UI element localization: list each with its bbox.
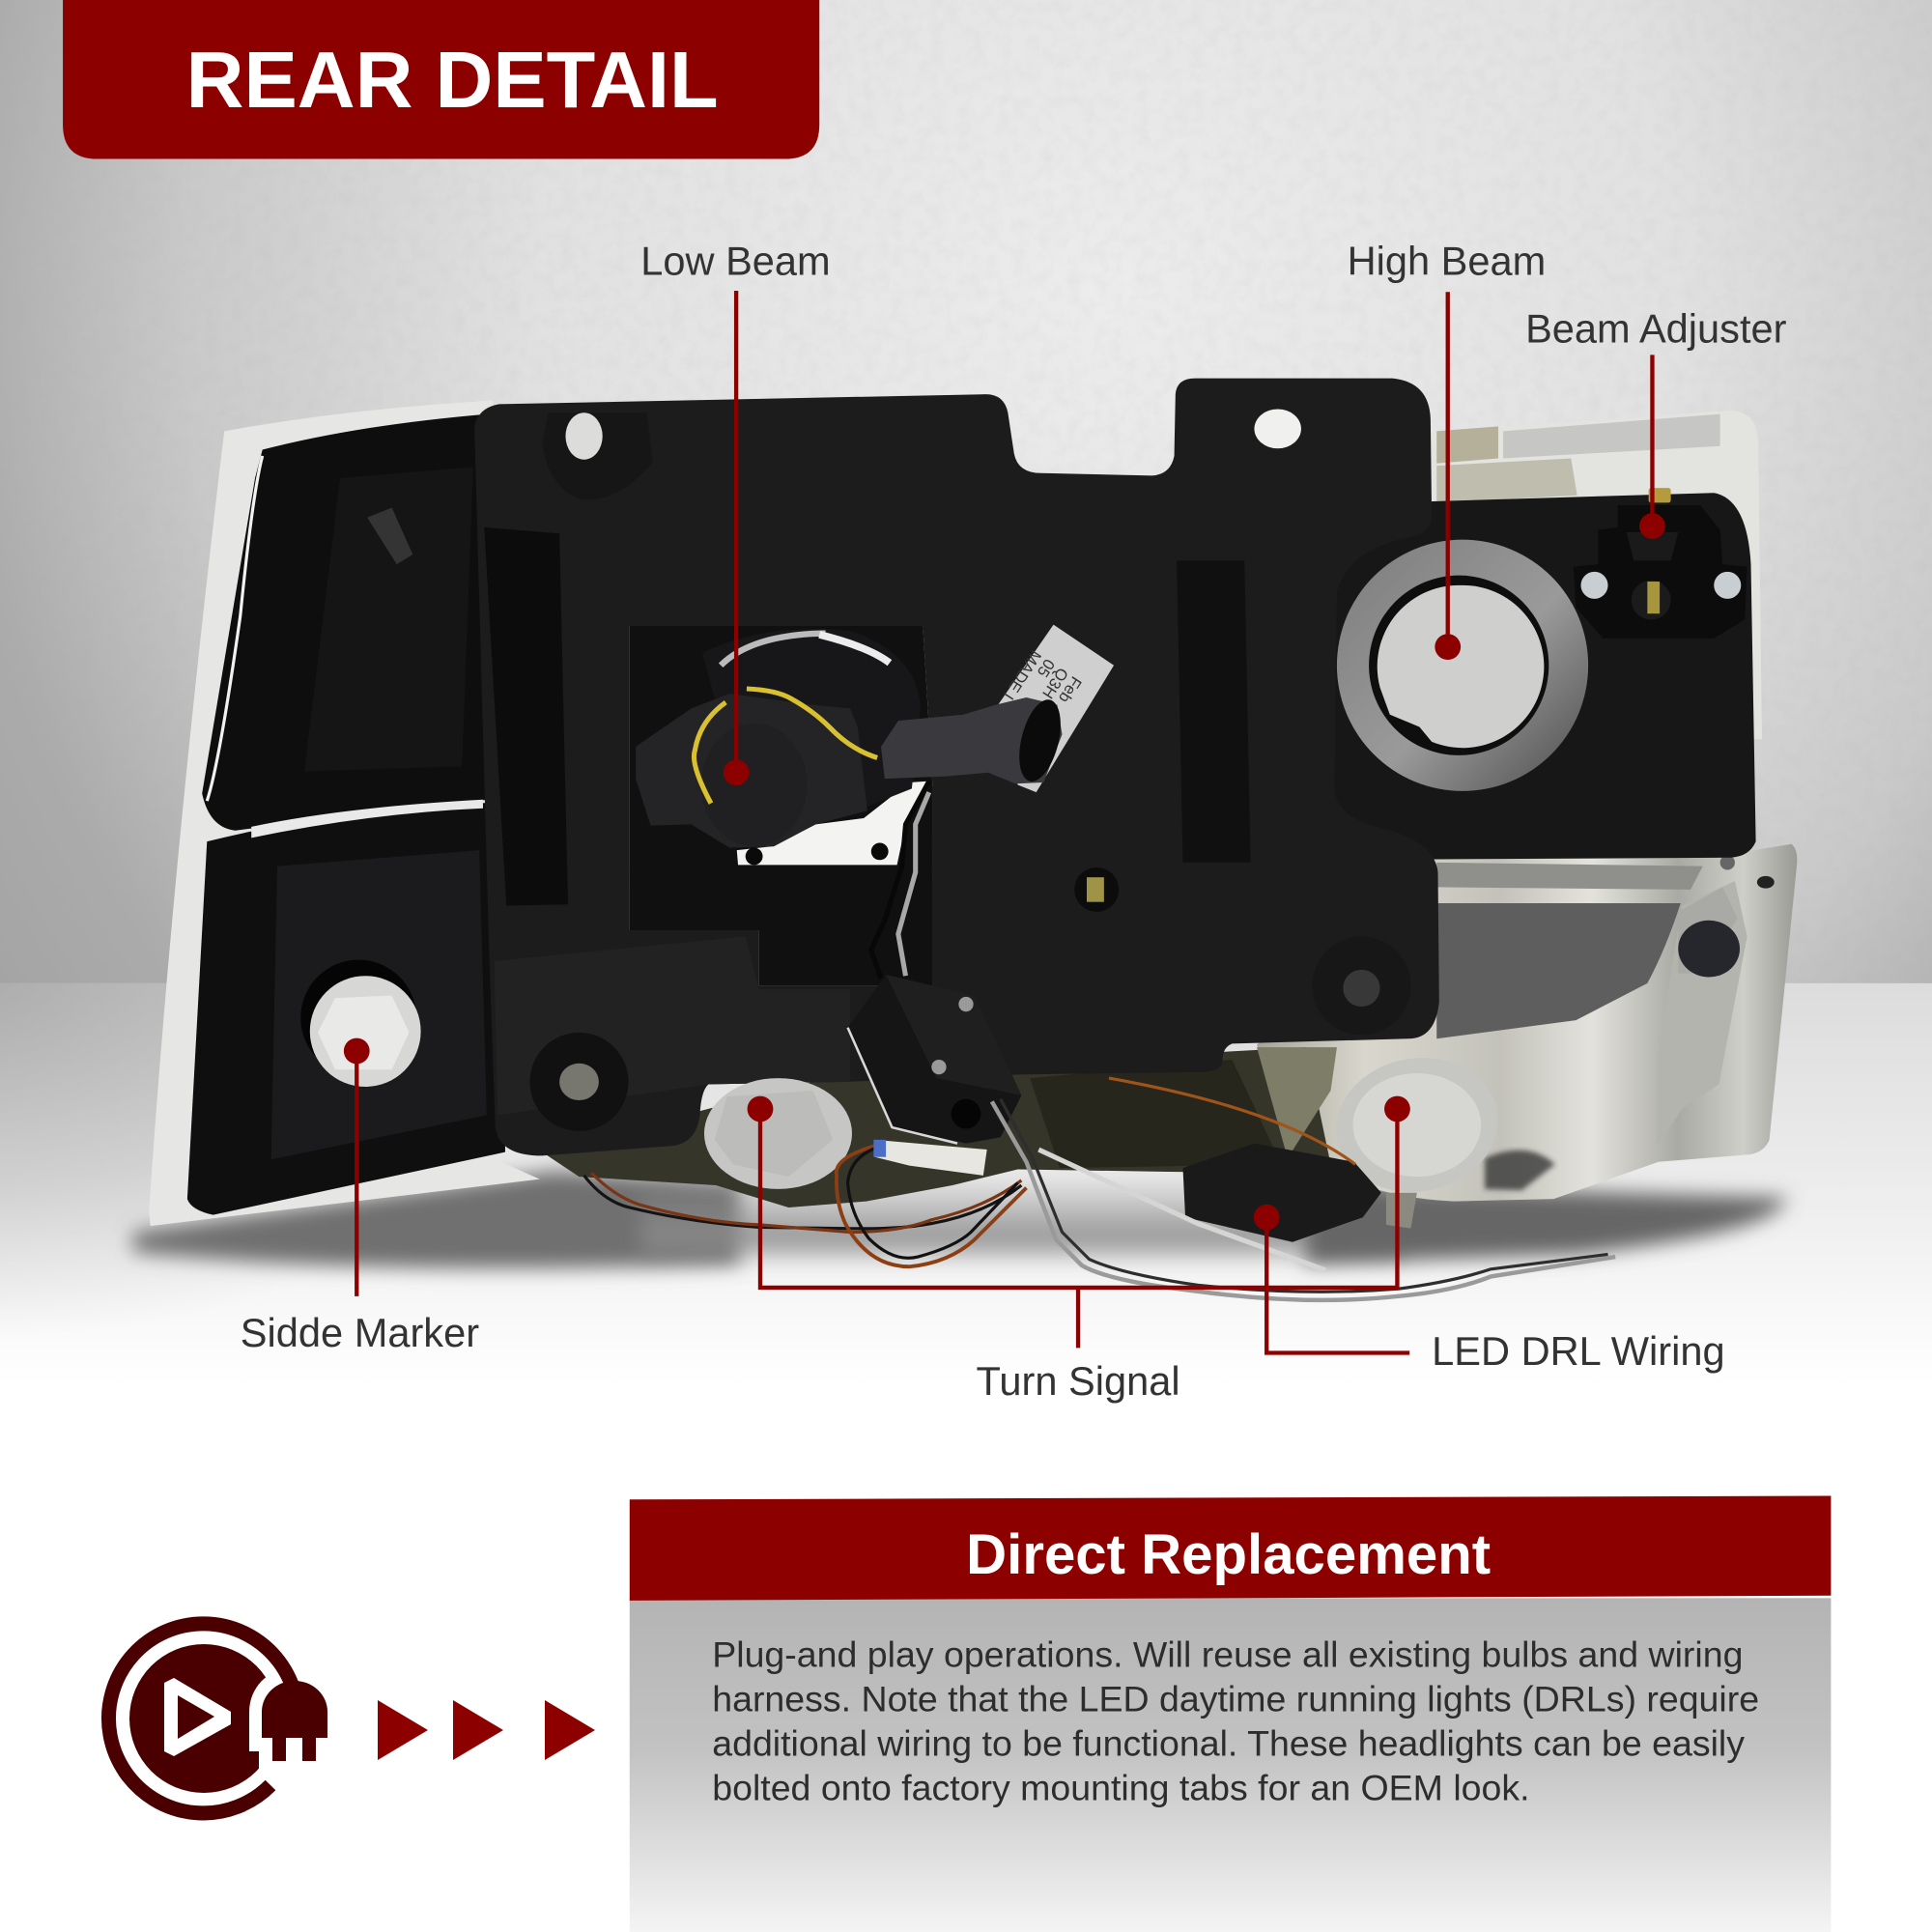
callout: Side Marker xyxy=(241,1038,479,1355)
turn signal bulb port, left xyxy=(704,1078,852,1189)
LED DRL control box xyxy=(1182,1144,1417,1242)
clear outer lens, left side xyxy=(149,401,540,1226)
wiring connector xyxy=(881,696,1068,785)
high beam reflector port xyxy=(1337,540,1588,791)
callout: High Beam xyxy=(1348,238,1546,660)
arrows pointing to panel xyxy=(378,1700,595,1760)
plate shading details xyxy=(484,412,1410,1131)
relay module xyxy=(848,975,1021,1144)
upper corner lamp, smoked xyxy=(202,414,488,831)
turn signal bulb port, right xyxy=(1325,1045,1509,1205)
callout: Turn Signal: Turn Signal xyxy=(977,1358,1180,1404)
panel body text: bolted onto factory mounting tabs for an OEM look. xyxy=(712,1768,1530,1808)
callout: Turn Signal xyxy=(748,1096,1410,1404)
title banner xyxy=(63,0,819,159)
callout: Low Beam: Low Beam xyxy=(640,238,831,283)
floor shadow xyxy=(133,1171,1786,1268)
callout: LED DRL Wiring xyxy=(1254,1205,1725,1374)
callout: High Beam: High Beam xyxy=(1348,238,1546,283)
panel: Direct Replacement xyxy=(630,1495,1831,1932)
panel heading: Direct Replacement xyxy=(966,1523,1491,1586)
callout: Beam Adjuster: Beam Adjuster xyxy=(1525,306,1787,352)
chrome reflector housing, lower right xyxy=(1257,844,1797,1202)
headlight assembly photo xyxy=(149,379,1797,1300)
low beam bulb window xyxy=(630,626,933,985)
clear upper lens, right side xyxy=(1417,411,1762,739)
olive interior strip along the bottom xyxy=(542,1047,1331,1208)
product label sticker: Q3H xyxy=(1038,665,1072,702)
callout: Side Marker: Sidde Marker xyxy=(241,1310,479,1355)
product label sticker xyxy=(998,625,1114,792)
callout: Low Beam xyxy=(640,238,831,785)
lower corner lamp, smoked xyxy=(187,800,505,1215)
panel body text: additional wiring to be functional. These headlights can be easily xyxy=(712,1723,1745,1764)
product label sticker: MADE I xyxy=(1000,647,1045,703)
callout: Beam Adjuster xyxy=(1525,306,1787,539)
product label sticker: Feb xyxy=(1055,673,1086,706)
high beam dark panel xyxy=(1306,493,1756,860)
wires down from connector xyxy=(871,781,929,979)
title: REAR DETAIL: REAR DETAIL xyxy=(186,35,719,125)
mounting holes xyxy=(565,409,1301,460)
main black mounting plate xyxy=(474,379,1439,1155)
panel body text xyxy=(712,1634,1759,1808)
panel body text: Plug-and play operations. Will reuse all existing bulbs and wiring xyxy=(712,1634,1743,1675)
product label sticker: 05 xyxy=(1034,656,1059,681)
beam adjuster hardware xyxy=(1574,488,1747,639)
exposed wiring and connector xyxy=(584,1078,1615,1300)
callout: LED DRL Wiring: LED DRL Wiring xyxy=(1432,1328,1725,1374)
side marker bulb port xyxy=(300,960,421,1087)
panel body text: harness. Note that the LED daytime running lights (DRLs) require xyxy=(712,1679,1759,1719)
icon: plug and play xyxy=(108,1624,338,1813)
